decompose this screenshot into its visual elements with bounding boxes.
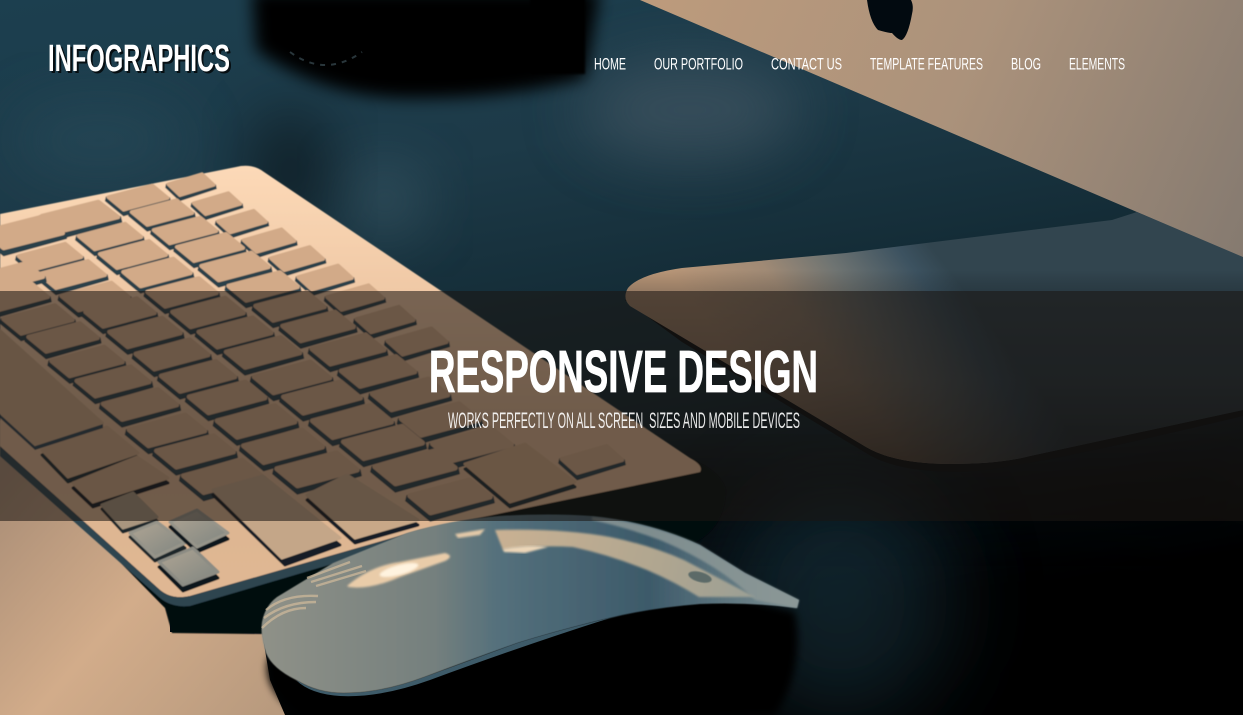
keyboard shadow [0, 440, 726, 634]
number key row [106, 185, 515, 468]
mouse lower glint [503, 546, 548, 553]
mouse stripes [262, 562, 366, 628]
navigation menu [594, 54, 1125, 74]
hero scene: WORKS PERFECTLY ON ALL SCREEN SIZES AND MOBILE DEVICES [448, 408, 800, 433]
home key row [0, 217, 361, 494]
keyboard [0, 166, 726, 634]
navigation menu: HOME [594, 54, 626, 74]
mouse top light panel [495, 530, 755, 597]
function key row [166, 174, 625, 480]
left modifier keys [42, 427, 168, 507]
mouse upper glint [455, 529, 485, 538]
keyboard body [0, 166, 701, 597]
qwerty key row [39, 202, 494, 521]
apple logo [867, 0, 913, 40]
tan desk surface [0, 420, 285, 715]
arrow keys [102, 493, 228, 591]
navigation menu: BLOG [1011, 54, 1041, 74]
site logo [48, 38, 232, 82]
monitor back [640, 0, 1243, 258]
camera lens object [252, 0, 600, 98]
space bar [213, 476, 340, 565]
lower key row [0, 263, 266, 500]
dark text band [0, 291, 1243, 521]
shift key [0, 330, 103, 450]
mouse shadow [267, 560, 798, 715]
mouse body [262, 514, 799, 693]
mouse highlight [378, 560, 420, 580]
right wide key [307, 475, 418, 543]
mouse apple mark [687, 569, 713, 585]
mouse [262, 514, 799, 715]
return key [465, 444, 575, 507]
monitor stand foot [625, 212, 1243, 472]
site logo: INFOGRAPHICS [48, 38, 230, 80]
navigation menu: CONTACT US [771, 54, 842, 74]
navigation menu: TEMPLATE FEATURES [870, 54, 983, 74]
mouse reflection [347, 553, 450, 588]
mouse lower edge tone [296, 618, 610, 696]
navigation menu: ELEMENTS [1069, 54, 1125, 74]
mouse right shoulder [592, 517, 799, 608]
main heading: RESPONSIVE DESIGN [429, 339, 818, 405]
keyboard front edge [0, 446, 420, 606]
site logo: INFOGRAPHICS [50, 40, 232, 82]
navigation menu: OUR PORTFOLIO [654, 54, 743, 74]
